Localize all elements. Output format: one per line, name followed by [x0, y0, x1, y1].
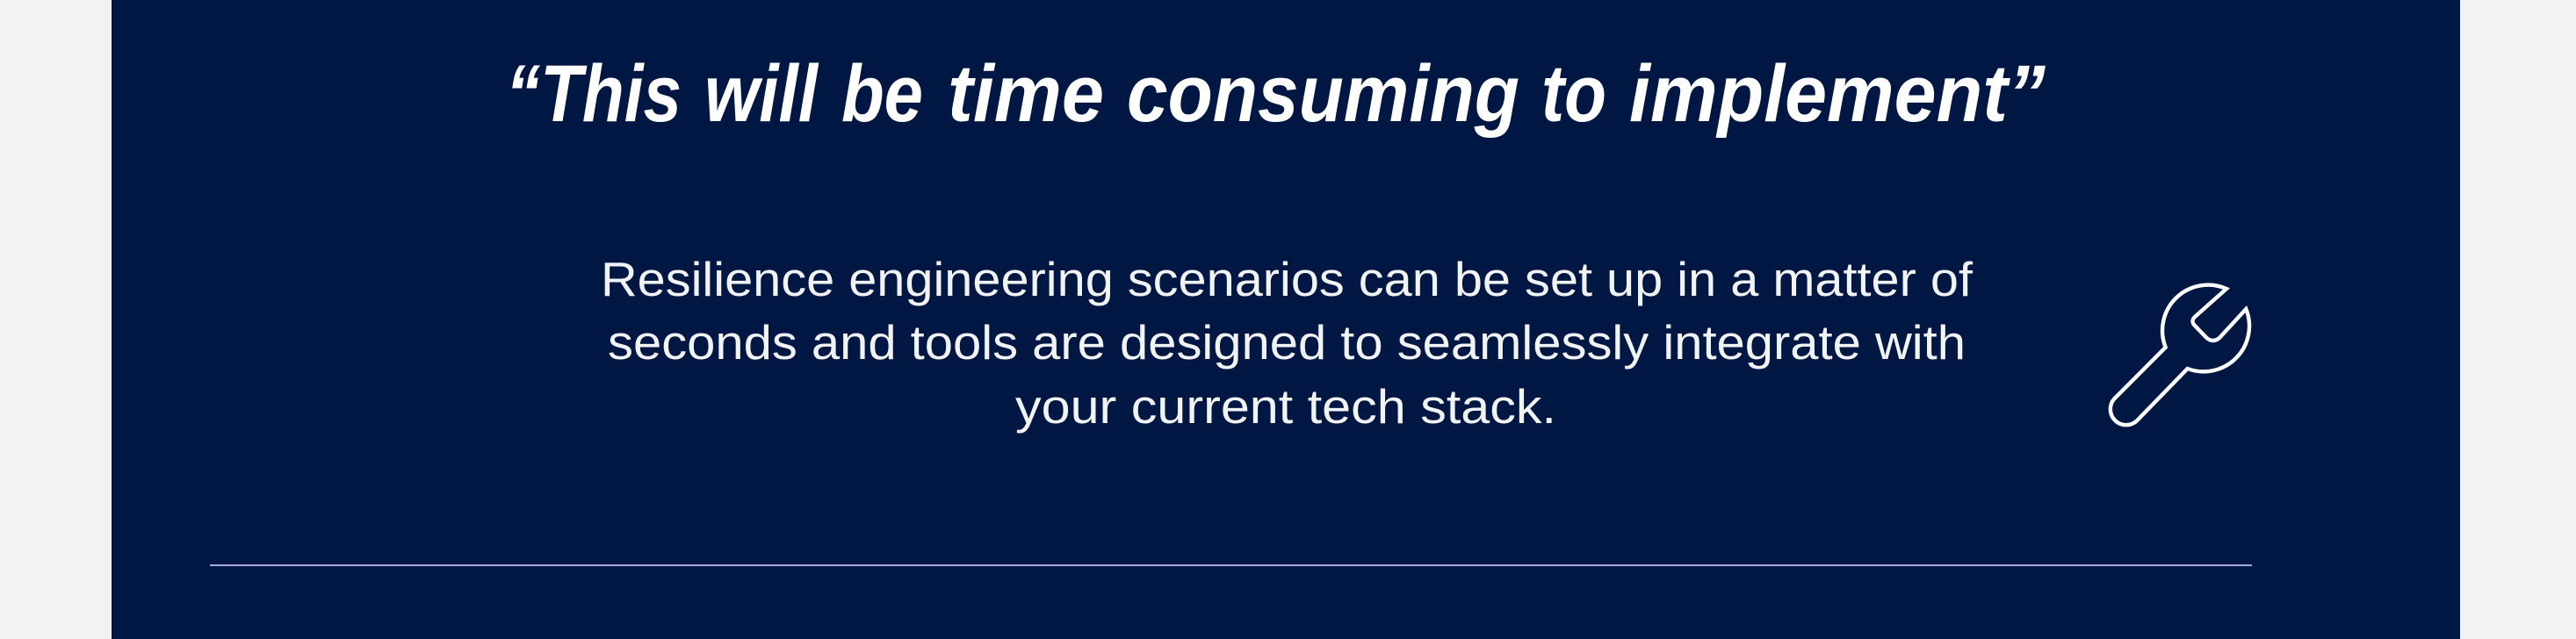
icon: wrench [2111, 285, 2249, 425]
text block: explanation: Resilience engineering scenarios can be set up in a matter of [601, 252, 1973, 306]
title [506, 49, 2046, 139]
title: be [841, 49, 923, 139]
text block: explanation: seconds and tools are designed to seamlessly integrate with [608, 315, 1966, 370]
title: will [704, 49, 819, 139]
title: time [948, 49, 1104, 139]
text block: explanation: your current tech stack. [1015, 379, 1556, 434]
title: to [1541, 49, 1606, 139]
title: “This [506, 49, 682, 139]
text block: explanation [601, 252, 1973, 434]
title: consuming [1127, 49, 1519, 139]
title: implement” [1629, 49, 2046, 139]
